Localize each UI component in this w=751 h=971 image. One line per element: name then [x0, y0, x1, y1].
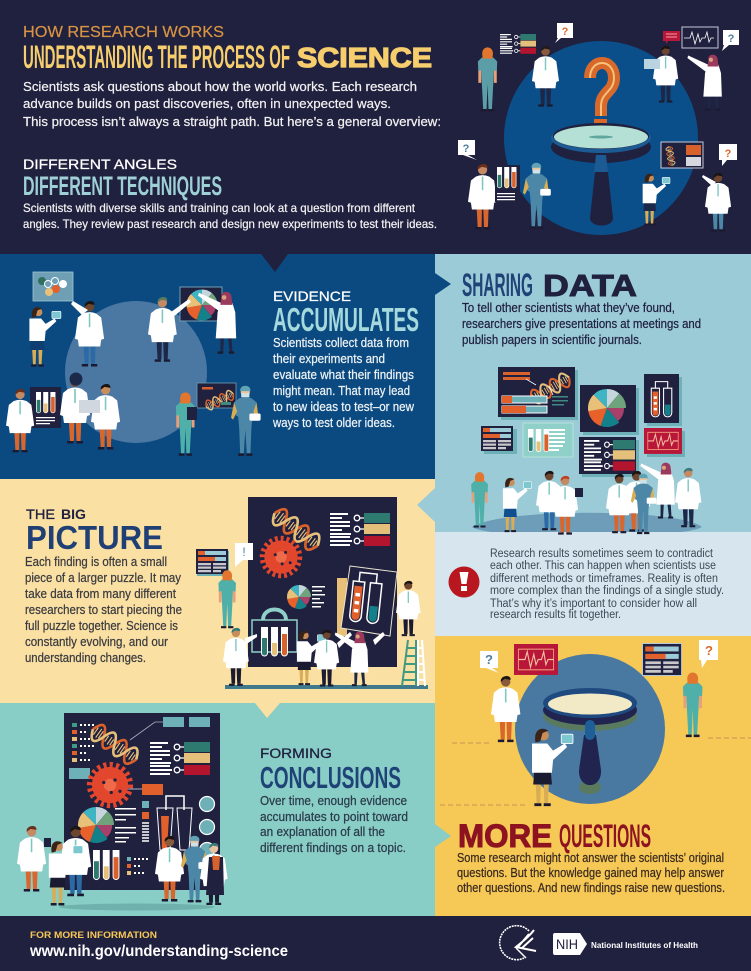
text: evidence accumulates: to new ideas to test–or new	[273, 400, 415, 414]
text: evidence accumulates: their experiments and	[273, 352, 385, 366]
eyebrow: how research works: HOW RESEARCH WORKS	[23, 24, 224, 41]
heading: more questions	[458, 818, 651, 854]
arrow: evidence to sharing	[435, 273, 451, 295]
arrow: conclusions to more questions	[435, 824, 451, 847]
poster: dna	[498, 367, 578, 420]
arrow: big picture to conclusions	[255, 703, 280, 718]
text: the big picture: piece of a larger puzzle. It may	[25, 571, 182, 585]
chart: molecule card	[33, 272, 73, 301]
text: different techniques	[23, 201, 437, 231]
illustration: magnifying glass with question and scientists	[458, 23, 739, 235]
poster: results	[523, 423, 573, 457]
text: sharing data	[462, 301, 701, 347]
chart: test tubes	[93, 850, 119, 880]
chart: pie	[78, 807, 136, 843]
heading: different angles different techniques	[23, 156, 222, 201]
heading: different angles different techniques: DIFFERENT TECHNIQUES	[23, 171, 222, 201]
heading: evidence accumulates: EVIDENCE	[273, 288, 351, 304]
text: QUESTIONS	[559, 818, 651, 854]
ladder	[402, 640, 425, 686]
text: the big picture: constantly evolving, and our	[25, 635, 168, 649]
panel: contradiction note	[435, 532, 751, 636]
intro paragraph: This process isn’t always a straight path. But here’s a general overview:	[23, 114, 441, 129]
text: forming conclusions: Over time, enough evidence	[260, 794, 407, 808]
illustration: poster session	[435, 367, 751, 542]
text: forming conclusions: different findings on a topic.	[260, 841, 406, 855]
heading: the big picture: THE	[26, 506, 55, 522]
text: more questions	[457, 851, 725, 895]
heading: evidence accumulates: ACCUMULATES	[273, 301, 419, 338]
chart: color key	[150, 742, 210, 775]
text: contradiction note: Research results sometimes seem to contradict	[490, 548, 714, 560]
text: contradiction note: each other. This can happen when scientists use	[490, 560, 716, 572]
chart: image board	[661, 142, 703, 168]
text: evidence accumulates: evaluate what their findings	[273, 368, 414, 382]
title: SCIENCE	[297, 42, 432, 73]
heading: different angles different techniques: DIFFERENT ANGLES	[23, 156, 177, 172]
intro paragraph	[23, 79, 441, 129]
icon: warning	[448, 566, 480, 598]
panel: intro background	[0, 0, 751, 254]
text: sharing data: To tell other scientists what they’ve found,	[462, 301, 675, 315]
arrow: sharing to big picture	[417, 488, 435, 522]
icon: question mark	[590, 63, 614, 129]
panel: the big picture	[0, 479, 435, 703]
text: the big picture: Each finding is often a small	[25, 555, 167, 569]
title: UNDERSTANDING THE PROCESS OF	[23, 39, 290, 75]
text: more questions: questions. But the knowledge gained may help answer	[457, 866, 724, 880]
chart: color key	[330, 513, 390, 546]
scientists	[491, 672, 702, 806]
speech bubbles: ?	[728, 33, 735, 45]
logo: hhs eagle	[500, 926, 536, 960]
intro paragraph: Scientists ask questions about how the world works. Each research	[23, 79, 417, 94]
icon: magnifier	[551, 123, 651, 226]
speech bubbles	[458, 23, 739, 166]
heading: sharing data: DATA	[543, 268, 637, 303]
chart: legend dots	[72, 723, 96, 762]
text: evidence accumulates: Scientists collect data from	[273, 336, 409, 350]
text: forming conclusions: an explanation of all the	[260, 825, 385, 839]
chart: heart monitor	[663, 27, 718, 48]
chart: apparatus	[157, 796, 192, 850]
chart: test tube board	[30, 387, 61, 428]
chart: test tubes	[495, 165, 520, 202]
heading: forming conclusions: FORMING	[260, 745, 332, 761]
illustration: big picture board	[196, 497, 428, 689]
icons: organs	[200, 796, 214, 858]
heading: evidence accumulates	[273, 288, 419, 338]
poster: test tubes	[644, 374, 682, 426]
speech bubbles: ?	[562, 26, 569, 38]
heading: more questions: MORE	[458, 818, 552, 854]
text: the big picture: take data from many different	[25, 587, 176, 601]
text: forming conclusions: accumulates to point toward	[260, 810, 408, 824]
text: evidence accumulates: might mean. That may lead	[273, 384, 410, 398]
panel: forming conclusions	[0, 703, 435, 916]
poster: progress bars	[481, 426, 517, 454]
speech bubbles: ?	[725, 148, 732, 160]
panel: evidence accumulates	[0, 254, 435, 479]
chart: dna board	[197, 383, 236, 411]
text: different techniques: Scientists with diverse skills and training can look at a question from different	[23, 201, 416, 215]
text: the big picture: understanding changes.	[25, 651, 146, 665]
text: sharing data: publish papers in scientific journals.	[462, 333, 642, 347]
heading: the big picture: PICTURE	[26, 519, 163, 556]
text: contradiction note: more complex than the findings of a single study.	[490, 585, 724, 597]
chart: small legend	[127, 801, 150, 875]
scientists	[468, 46, 731, 232]
illustration: magnifier and new questions	[440, 640, 751, 806]
illustration: conclusions board	[17, 713, 228, 910]
chart: progress card	[642, 643, 682, 676]
chart: test tube rack	[252, 610, 297, 656]
panel: sharing data	[435, 254, 751, 532]
scientists	[218, 570, 421, 687]
text: for more information: FOR MORE INFORMATION	[30, 930, 157, 941]
speech bubble	[235, 543, 253, 567]
poster: color key	[579, 437, 639, 477]
illustration: scientists collecting evidence	[6, 272, 261, 456]
text: contradiction note: different methods or timeframes. Reality is often	[490, 573, 718, 585]
heading: sharing data: SHARING	[462, 267, 533, 303]
speech bubbles: ?	[485, 652, 493, 667]
text: forming conclusions	[260, 794, 408, 855]
text: sharing data: researchers give presentations at meetings and	[462, 317, 701, 331]
chart: color key	[500, 34, 536, 54]
chart: pie board	[180, 287, 222, 321]
text: the big picture: full puzzle together. Science is	[25, 619, 178, 633]
scientists	[471, 463, 701, 535]
logo: nih: National Institutes of Health	[591, 940, 698, 950]
panel: footer	[0, 916, 751, 971]
logo: nih	[553, 933, 698, 955]
text: evidence accumulates: ways to test older ideas.	[272, 416, 395, 430]
chart: heart monitor	[514, 644, 558, 675]
chart: dna	[269, 506, 323, 553]
chart: virus	[263, 539, 299, 575]
poster: heart monitor	[644, 428, 685, 457]
text: different techniques: angles. They review past research and design new experiments to test their ideas.	[23, 217, 437, 231]
speech bubbles	[480, 640, 718, 673]
logo: nih: NIH	[556, 937, 578, 952]
speech bubble: !	[242, 545, 246, 559]
icon: magnifier	[543, 688, 637, 794]
speech bubbles: ?	[705, 643, 713, 658]
heading: forming conclusions: CONCLUSIONS	[260, 760, 401, 795]
poster: pie chart	[580, 385, 639, 435]
text: for more information: www.nih.gov/understanding-science	[29, 943, 288, 960]
scientists	[17, 826, 228, 905]
chart: progress card	[196, 549, 229, 576]
arrow: intro to evidence	[261, 254, 288, 272]
text: evidence accumulates	[272, 336, 415, 430]
text: for more information	[29, 930, 288, 960]
chart: virus	[90, 765, 130, 805]
chart: test tube poster	[337, 566, 397, 636]
chart: pie	[287, 585, 325, 609]
heading: the big picture: BIG	[61, 506, 86, 522]
speech bubbles: ?	[463, 143, 470, 155]
text: contradiction note: That’s why it’s important to consider how all	[490, 598, 697, 610]
scientists	[6, 292, 261, 456]
text: the big picture: researchers to start piecing the	[25, 603, 182, 617]
chart: dna	[88, 722, 142, 767]
text: the big picture	[25, 555, 182, 665]
heading: forming conclusions	[260, 745, 401, 795]
text: contradiction note	[490, 548, 724, 621]
text: contradiction note: research results fit together.	[490, 609, 621, 621]
chart: callouts	[69, 717, 210, 795]
intro paragraph: advance builds on past discoveries, often in unexpected ways.	[23, 96, 391, 111]
panel: more questions	[435, 636, 751, 916]
